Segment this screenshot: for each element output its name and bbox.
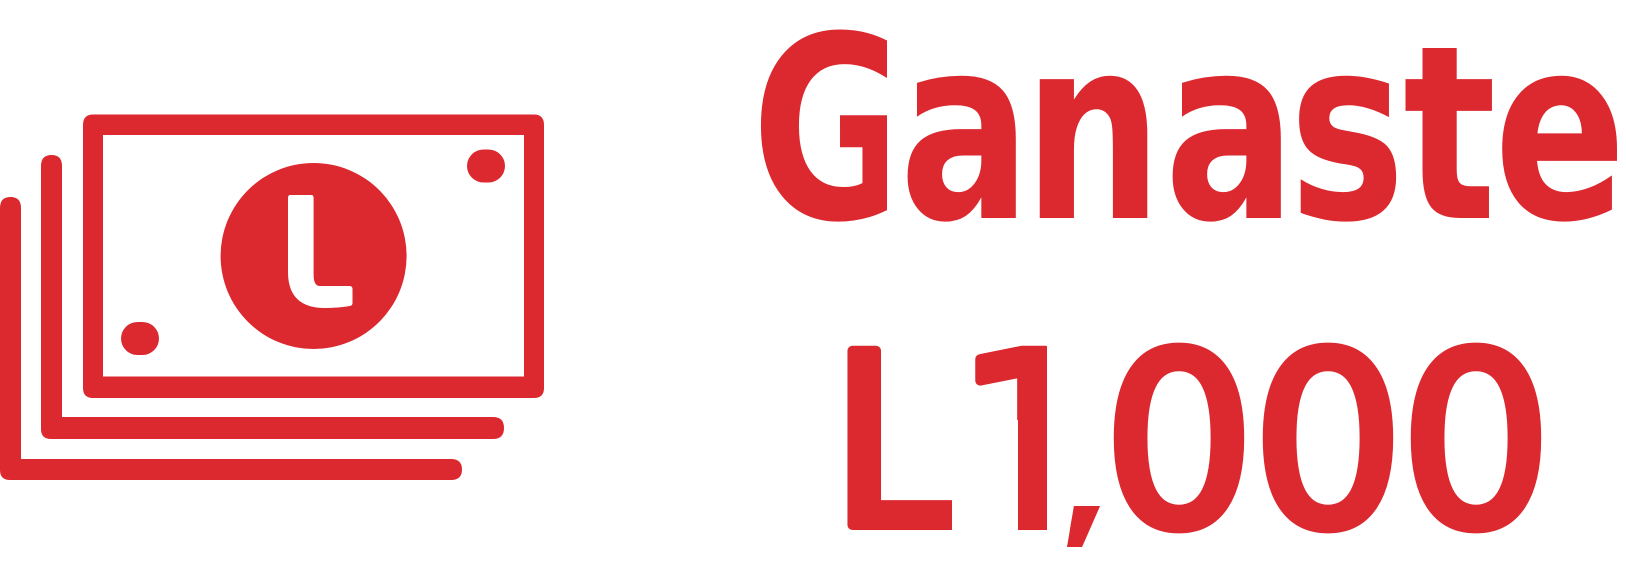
front banknote frame	[83, 114, 544, 398]
banknote corner dot, bottom left	[121, 322, 159, 355]
banknote corner dot, top right	[467, 150, 505, 182]
amount: L1,000: L1,000	[829, 304, 1552, 582]
icon: stack of banknotes	[0, 114, 544, 480]
banknote centre coin	[221, 163, 407, 349]
letter L on coin	[288, 195, 352, 308]
back banknote edge	[0, 197, 462, 480]
middle banknote edge	[41, 155, 504, 439]
